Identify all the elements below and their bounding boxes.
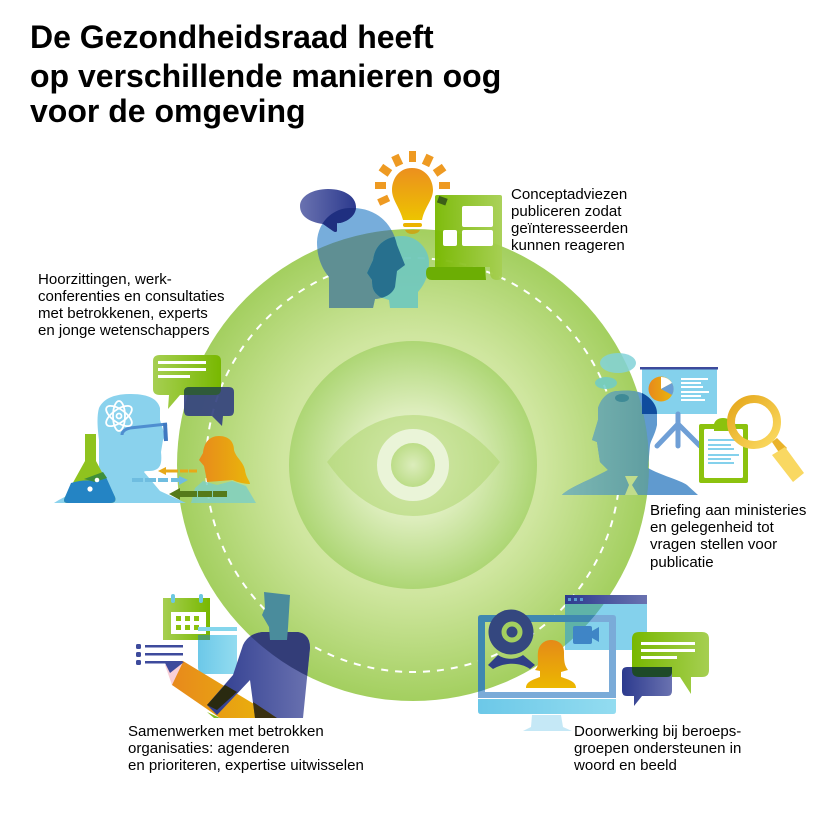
label: hearings: met betrokkenen, experts	[38, 305, 208, 322]
label: publications: groepen ondersteunen in	[574, 740, 741, 757]
icon: bubbles overlap	[184, 387, 221, 395]
icon: flask	[64, 434, 115, 503]
icon: head silhouette	[562, 391, 698, 495]
icon: monitor stand	[523, 715, 572, 731]
label: draft advice	[511, 186, 628, 254]
icon: presentation board	[640, 367, 718, 414]
title: voor de omgeving	[30, 93, 306, 129]
icon: woman portrait	[526, 640, 576, 688]
icon: clipboard	[699, 418, 748, 483]
icon: green speech bubble	[153, 355, 221, 409]
label: briefing: Briefing aan ministeries	[650, 502, 806, 519]
icon: woman torso	[191, 481, 256, 503]
icon: browser window	[565, 595, 647, 650]
illustration: draft advice, top	[300, 151, 502, 308]
illustration: briefing, right	[562, 353, 804, 495]
arrow: blue to right	[132, 476, 188, 485]
icon: bow tie	[625, 476, 638, 495]
outer green circle	[177, 229, 649, 701]
illustration: collaboration, bottom left	[136, 592, 310, 718]
icon: list	[136, 644, 183, 665]
icon: light bulb rays	[375, 151, 450, 206]
icon: thought clouds	[595, 353, 636, 389]
icon: blue head	[317, 208, 405, 308]
icon: pencil and arm overlap	[207, 685, 237, 710]
label: hearings: conferenties en consultaties	[38, 288, 225, 305]
label: hearings	[38, 271, 225, 339]
label: draft advice: Conceptadviezen	[511, 186, 627, 203]
icon: browser window	[198, 627, 237, 674]
icon: calendar	[163, 594, 210, 640]
label: hearings: Hoorzittingen, werk-	[38, 271, 172, 288]
label: briefing	[650, 502, 806, 571]
icon: navy speech bubble	[622, 667, 672, 706]
icon: scientist head	[54, 394, 186, 503]
icon: navy speech bubble	[184, 387, 234, 426]
icon: heads overlap	[367, 236, 405, 298]
icon: monitor	[478, 615, 616, 714]
illustration: publications, bottom right	[478, 595, 709, 731]
label: briefing: en gelegenheid tot	[650, 519, 775, 536]
label: draft advice: geïnteresseerden	[511, 220, 628, 237]
label: publications: Doorwerking bij beroeps-	[574, 723, 741, 740]
label: draft advice: publiceren zodat	[511, 203, 622, 220]
icon: glasses	[122, 424, 167, 435]
icon: atom	[103, 401, 135, 431]
icon: head and board overlap	[642, 393, 657, 414]
central circle with eye	[177, 229, 649, 701]
eye shape	[327, 415, 500, 516]
label: collaboration: en prioriteren, expertise uitwisselen	[128, 757, 364, 774]
title	[30, 19, 501, 129]
label: collaboration	[128, 723, 364, 774]
icon: pencil	[165, 661, 277, 718]
icon: teal head	[367, 236, 429, 308]
icon: light bulb	[392, 168, 433, 234]
arrow: dark green to left	[169, 488, 227, 500]
iris ring	[384, 436, 442, 494]
label: hearings: en jonge wetenschappers	[38, 322, 210, 339]
label: collaboration: Samenwerken met betrokken	[128, 723, 324, 740]
icon: webcam	[488, 610, 535, 669]
icon: camera symbol	[573, 626, 599, 644]
icon: person body	[207, 632, 310, 718]
title: op verschillende manieren oog	[30, 58, 501, 94]
dashed orbit	[206, 258, 620, 672]
icon: pencil and body overlap	[253, 702, 277, 718]
label: publications: woord en beeld	[573, 757, 677, 774]
icon: screen document	[426, 195, 502, 280]
label: draft advice: kunnen reageren	[511, 237, 625, 254]
icon: bubble overlap	[322, 208, 356, 232]
arrow: yellow to left	[158, 467, 197, 475]
illustration: hearings, left	[54, 355, 256, 503]
icon: bubbles overlap	[632, 667, 672, 677]
icon: blue head over circle	[318, 230, 394, 308]
inner green circle	[289, 341, 537, 589]
icon: magnifying glass	[731, 399, 804, 482]
label: publications	[573, 723, 741, 774]
icon: green speech bubble	[632, 632, 709, 694]
title: De Gezondheidsraad heeft	[30, 19, 434, 55]
icon: dark spot on head	[615, 394, 629, 402]
icon: body over circle	[250, 632, 310, 676]
icon: head over circle	[562, 390, 649, 495]
icon: monitor screen tint	[485, 622, 609, 692]
icon: woman head and ponytail	[199, 436, 250, 484]
icon: speech bubble	[300, 189, 356, 232]
icon: tripod	[657, 414, 700, 446]
label: briefing: vragen stellen voor	[650, 536, 777, 553]
icon: person head	[262, 592, 290, 640]
label: collaboration: organisaties: agenderen	[128, 740, 289, 757]
label: briefing: publicatie	[650, 554, 714, 571]
